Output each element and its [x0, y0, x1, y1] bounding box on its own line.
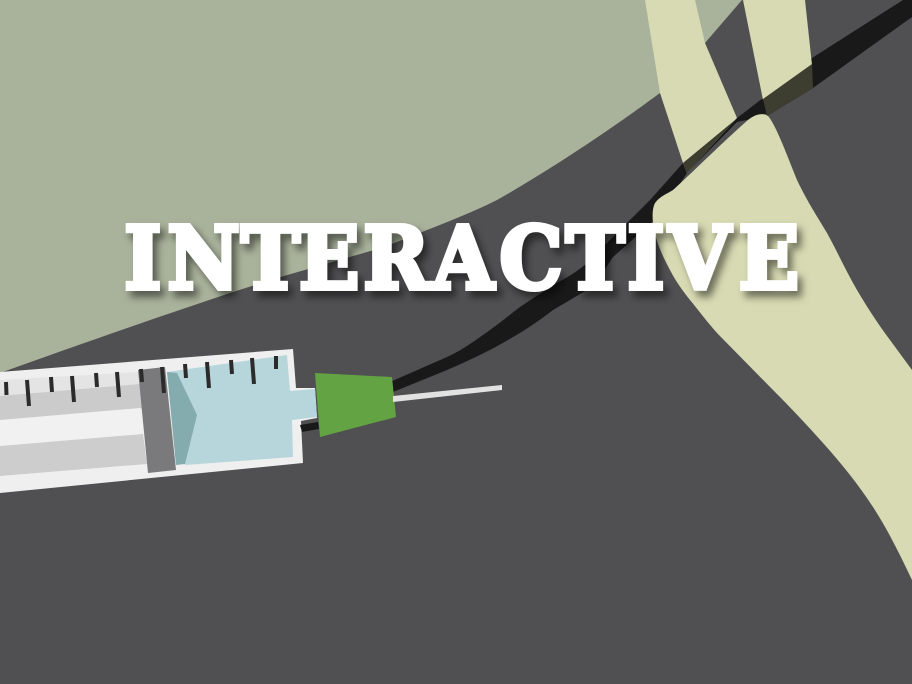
needle	[393, 385, 502, 402]
arm and palm	[653, 114, 912, 580]
plunger rod highlight	[0, 408, 143, 446]
sage green curved shape	[0, 0, 742, 373]
needle hub	[315, 373, 396, 437]
plunger seal	[138, 367, 176, 473]
hand with fingers	[645, 0, 912, 580]
tube stub under nozzle	[300, 422, 319, 432]
tube overlap: left finger	[683, 118, 737, 173]
scale ticks	[6, 356, 276, 406]
finger: left	[645, 0, 737, 173]
tube overlap: right finger	[763, 64, 813, 116]
plunger tip	[167, 372, 197, 465]
title: INTERACTIVE	[124, 208, 799, 309]
plunger rod shade	[0, 434, 147, 476]
barrel upper light band	[0, 372, 140, 396]
syringe	[0, 349, 502, 493]
tube seen through the fingers	[683, 64, 813, 173]
finger: right	[743, 0, 812, 100]
barrel outer shell	[0, 349, 317, 493]
liquid	[167, 355, 317, 465]
dark tube	[390, 0, 912, 392]
barrel upper gray shading	[0, 382, 143, 421]
